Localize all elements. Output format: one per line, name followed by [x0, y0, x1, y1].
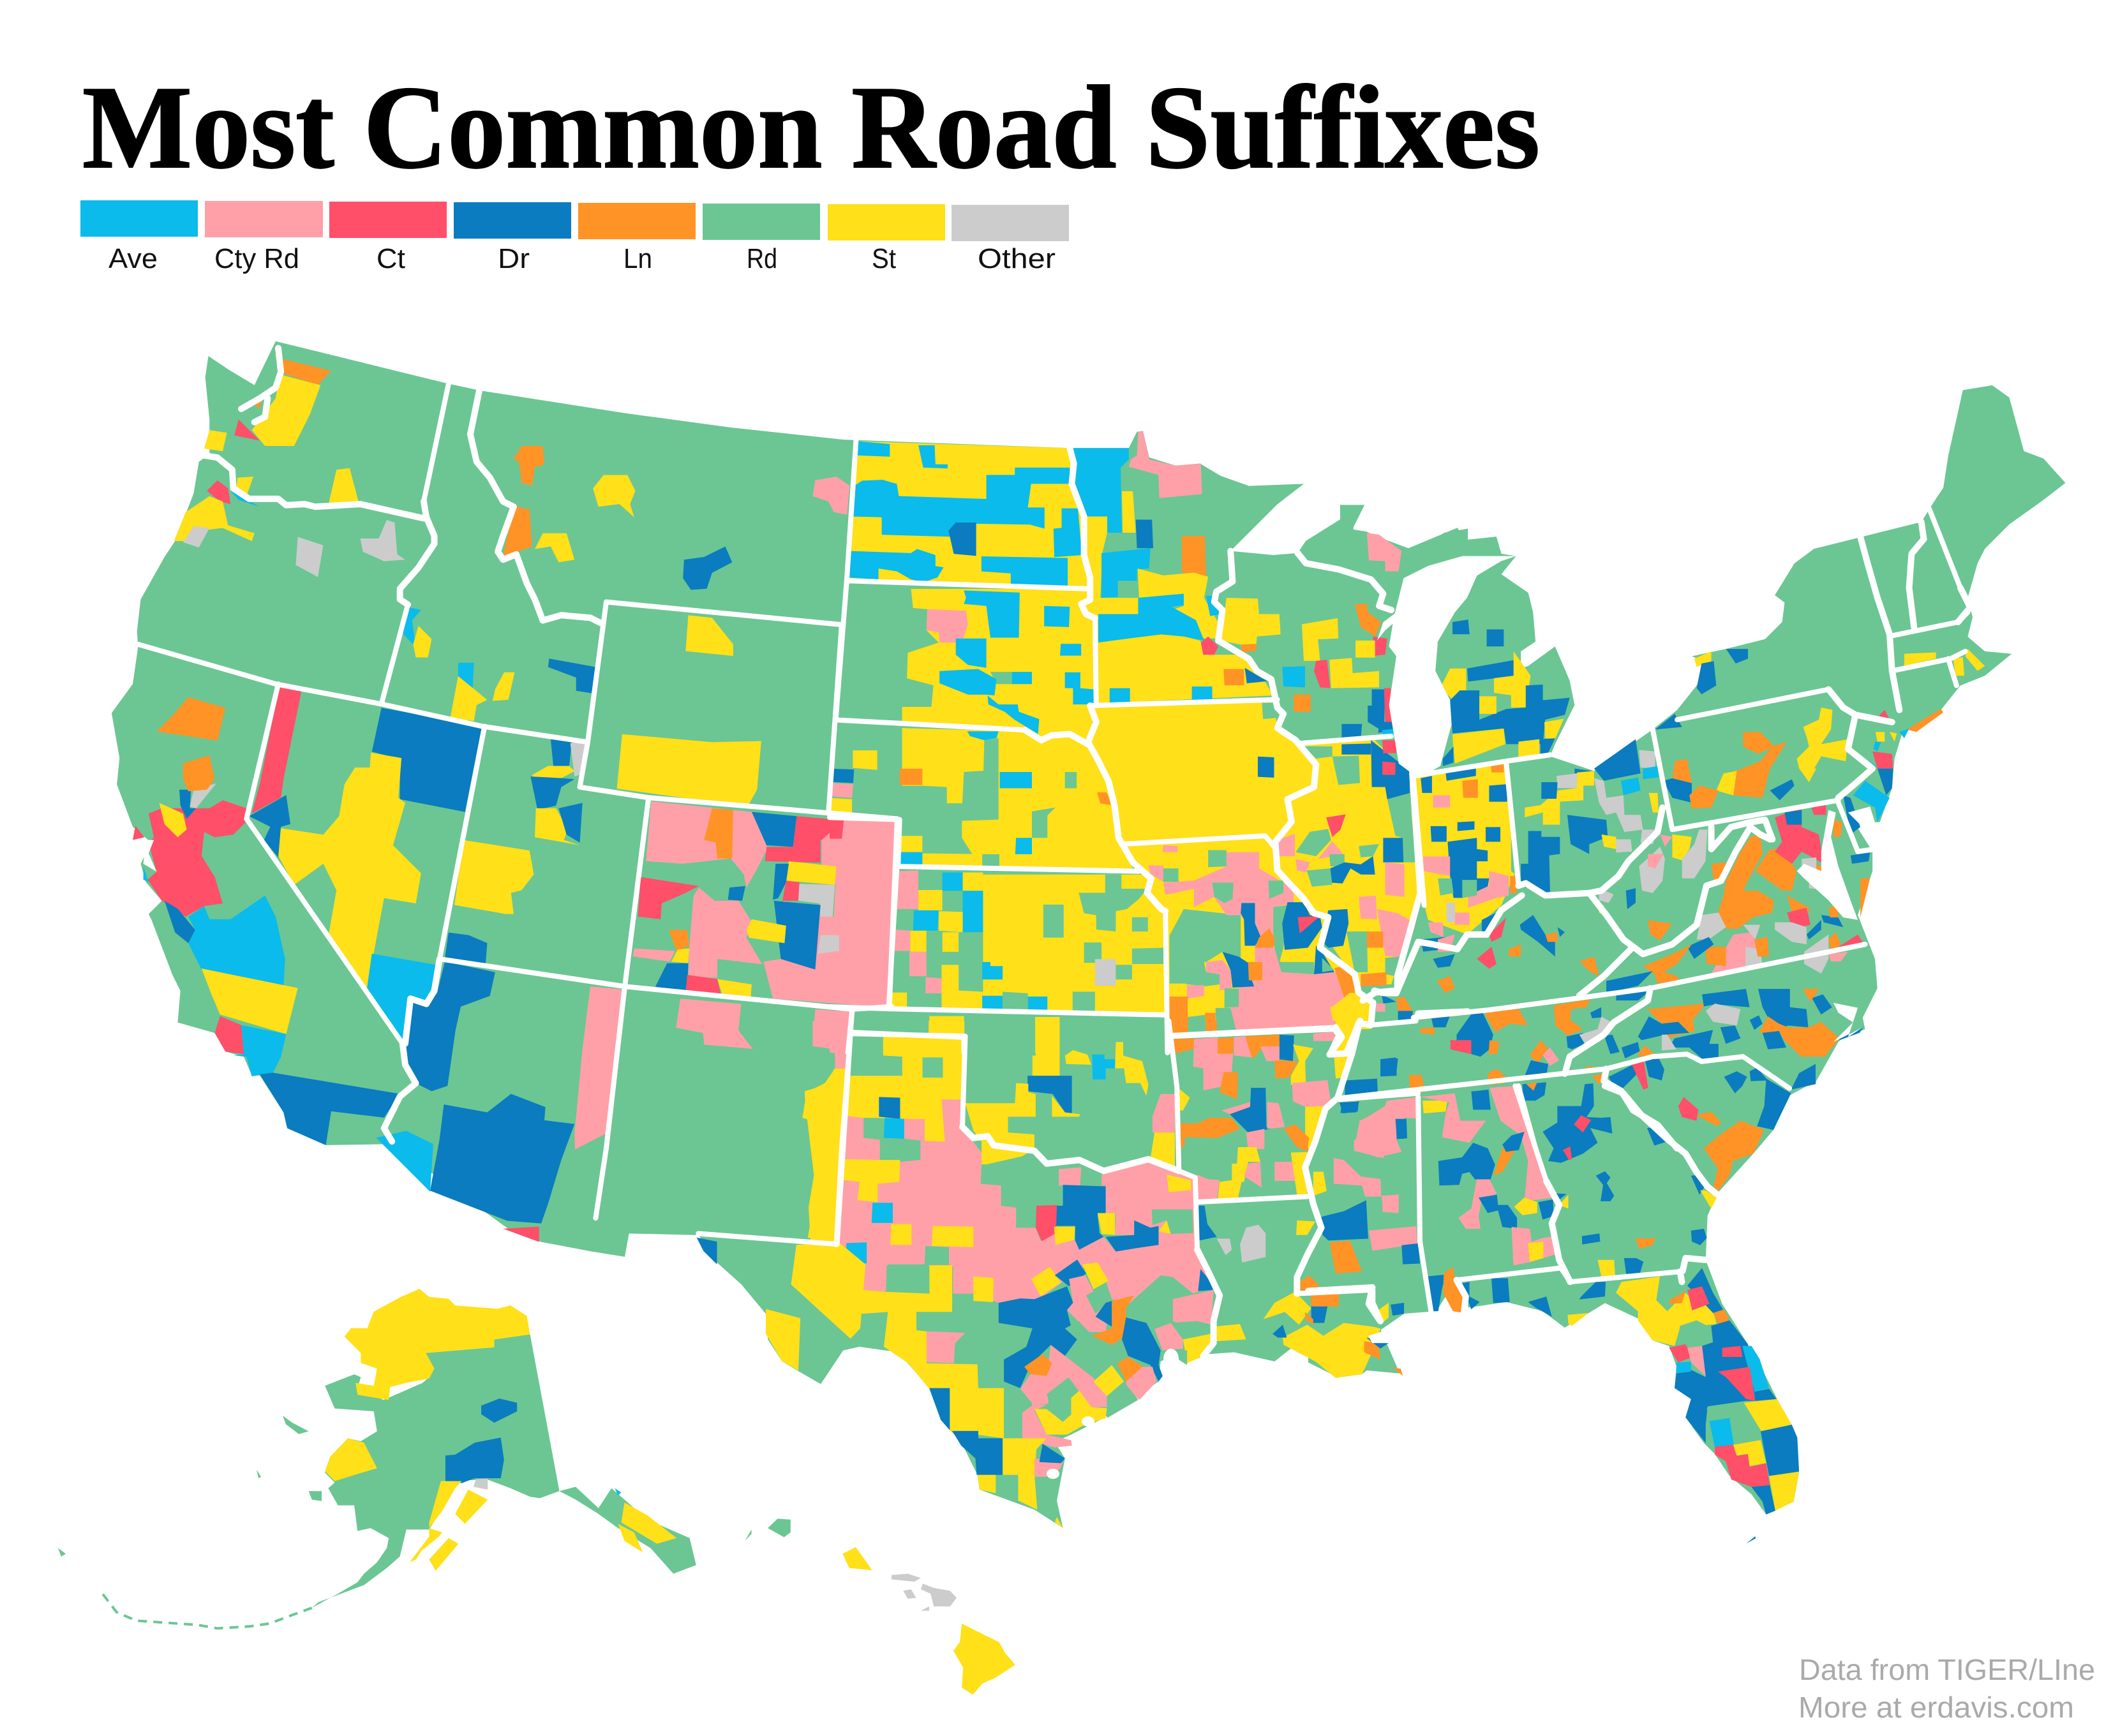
- footer: source credit: More at erdavis.com: [1798, 1691, 2074, 1724]
- map: Texas, Oklahoma, Arkansas and Louisiana counties: [697, 1021, 1404, 1528]
- map: state borders: [138, 383, 1970, 1356]
- title: Most Common Road Suffixes: [82, 62, 1540, 193]
- legend: St: [872, 243, 896, 274]
- footer: source credit: Data from TIGER/LIne: [1799, 1653, 2095, 1686]
- map: western states counties: [133, 359, 897, 1242]
- legend: Other: [978, 243, 1056, 274]
- map: land base: [112, 341, 2065, 1528]
- map: eastern and Great Lakes counties: [1414, 619, 1985, 1000]
- map: Alaska: [58, 1289, 696, 1628]
- footer: source credit: [1798, 1653, 2095, 1724]
- legend: [80, 200, 1069, 274]
- map: southeast states counties: [1332, 989, 1863, 1544]
- legend: Rd: [747, 243, 777, 274]
- legend: Ln: [623, 243, 652, 274]
- map: Hawaii: [745, 1518, 1015, 1695]
- map: lakes, bays and sounds: [144, 348, 1875, 1479]
- map of the United States: [58, 341, 2065, 1695]
- map: central states counties: [830, 431, 1420, 1053]
- legend: Dr: [498, 243, 530, 274]
- legend: Ct: [377, 243, 405, 274]
- legend: Ave: [108, 243, 158, 274]
- legend: Cty Rd: [214, 243, 299, 274]
